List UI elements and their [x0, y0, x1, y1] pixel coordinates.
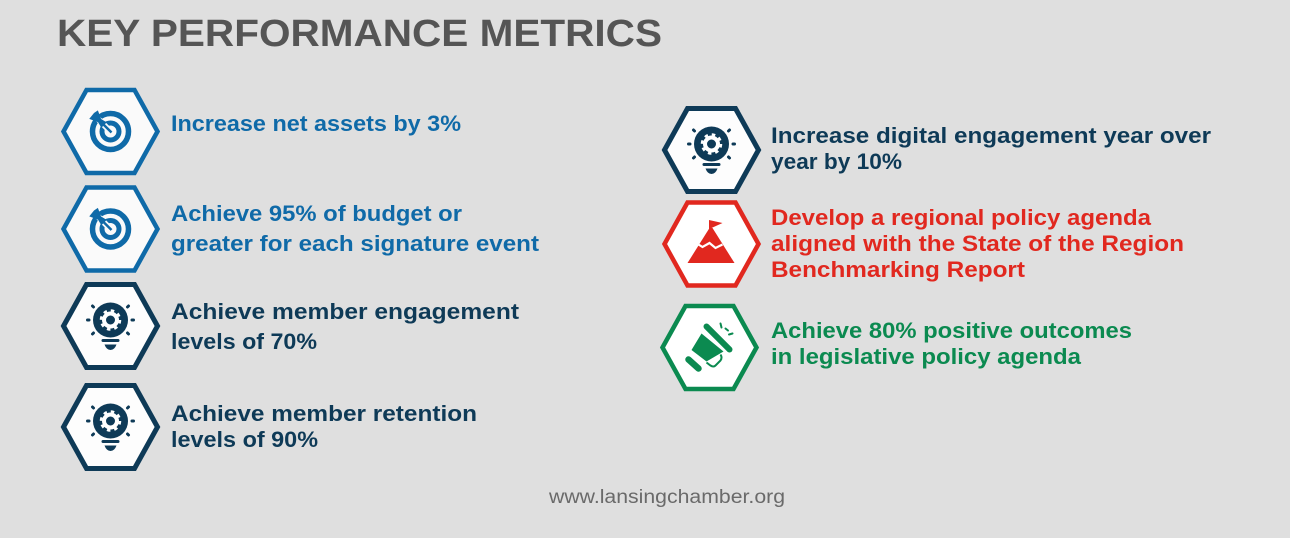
metric: digital engagement	[664, 108, 1211, 192]
title: KEY PERFORMANCE METRICS	[57, 13, 662, 55]
metric: budget	[64, 188, 540, 270]
label: Benchmarking Report	[771, 257, 1026, 282]
icon: lightbulb gear hexagon	[664, 108, 758, 192]
label: Achieve 95% of budget or	[171, 201, 462, 226]
label	[171, 299, 520, 354]
metric: legislative outcomes	[662, 306, 1132, 389]
label: Achieve 80% positive outcomes	[771, 318, 1132, 343]
icon: mountain flag hexagon	[664, 202, 758, 286]
label: greater for each signature event	[171, 231, 540, 256]
footer url: www.lansingchamber.org	[548, 487, 785, 508]
label	[771, 123, 1211, 174]
label: in legislative policy agenda	[771, 344, 1082, 369]
label: levels of 70%	[171, 329, 317, 354]
label: Achieve member engagement	[171, 299, 520, 324]
icon: target hexagon	[64, 188, 158, 270]
label	[771, 205, 1184, 282]
label: Increase net assets by 3%	[171, 111, 461, 136]
label	[771, 318, 1132, 369]
metric: net assets	[64, 90, 461, 173]
icon: lightbulb gear hexagon	[64, 386, 158, 468]
label: levels of 90%	[171, 427, 318, 452]
label: Achieve member retention	[171, 401, 477, 426]
icon: lightbulb gear hexagon	[64, 284, 158, 368]
icon: target hexagon	[64, 90, 158, 173]
label	[171, 201, 540, 256]
label: Develop a regional policy agenda	[771, 205, 1152, 230]
label: aligned with the State of the Region	[771, 231, 1184, 256]
metric: regional policy agenda	[664, 202, 1184, 286]
label: Increase digital engagement year over	[771, 123, 1211, 148]
metric: member engagement	[64, 284, 520, 368]
label	[171, 401, 477, 452]
metric: member retention	[64, 386, 477, 468]
label: year by 10%	[771, 149, 902, 174]
icon: megaphone hexagon	[662, 306, 756, 389]
